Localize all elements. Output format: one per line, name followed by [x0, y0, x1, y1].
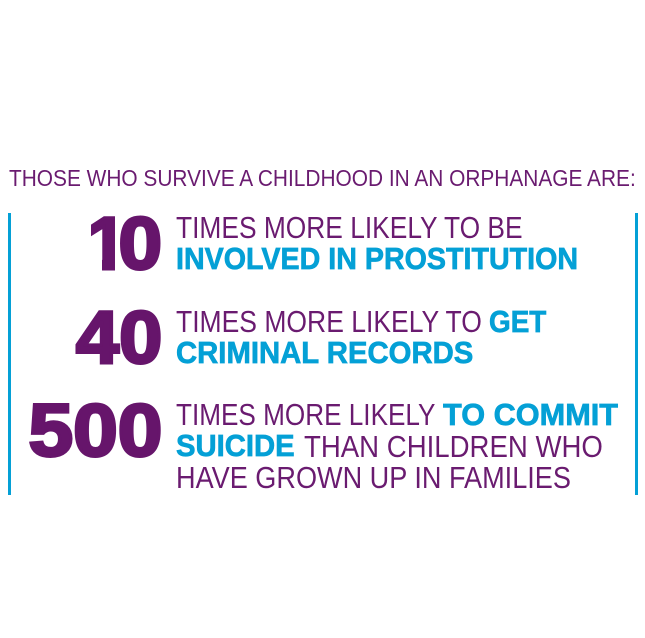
text: suicide: THAN CHILDREN WHO — [304, 429, 603, 464]
number: 10: 1 — [86, 202, 128, 285]
right border line — [635, 213, 638, 495]
text: criminal records: TIMES MORE LIKELY TO — [176, 304, 482, 339]
number: 10: 0 — [118, 202, 162, 285]
text: prostitution: TIMES MORE LIKELY TO BE — [176, 210, 523, 245]
text: suicide: SUICIDE — [176, 428, 295, 463]
number: 10 — [91, 202, 162, 285]
text: criminal records: CRIMINAL RECORDS — [176, 335, 473, 370]
text: suicide: HAVE GROWN UP IN FAMILIES — [176, 460, 571, 495]
text: criminal records: GET — [489, 304, 546, 339]
text: criminal records — [176, 304, 546, 370]
heading: THOSE WHO SURVIVE A CHILDHOOD IN AN ORPHANAGE ARE: — [9, 165, 636, 191]
text: prostitution — [176, 210, 578, 276]
text: suicide — [176, 397, 618, 495]
number: 500: 500 — [28, 389, 162, 472]
text: prostitution: INVOLVED IN PROSTITUTION — [176, 241, 578, 276]
left border line — [8, 213, 11, 495]
number: 40: 40 — [76, 296, 162, 379]
text: suicide: TO COMMIT — [443, 397, 618, 432]
text: suicide: TIMES MORE LIKELY — [176, 397, 435, 432]
